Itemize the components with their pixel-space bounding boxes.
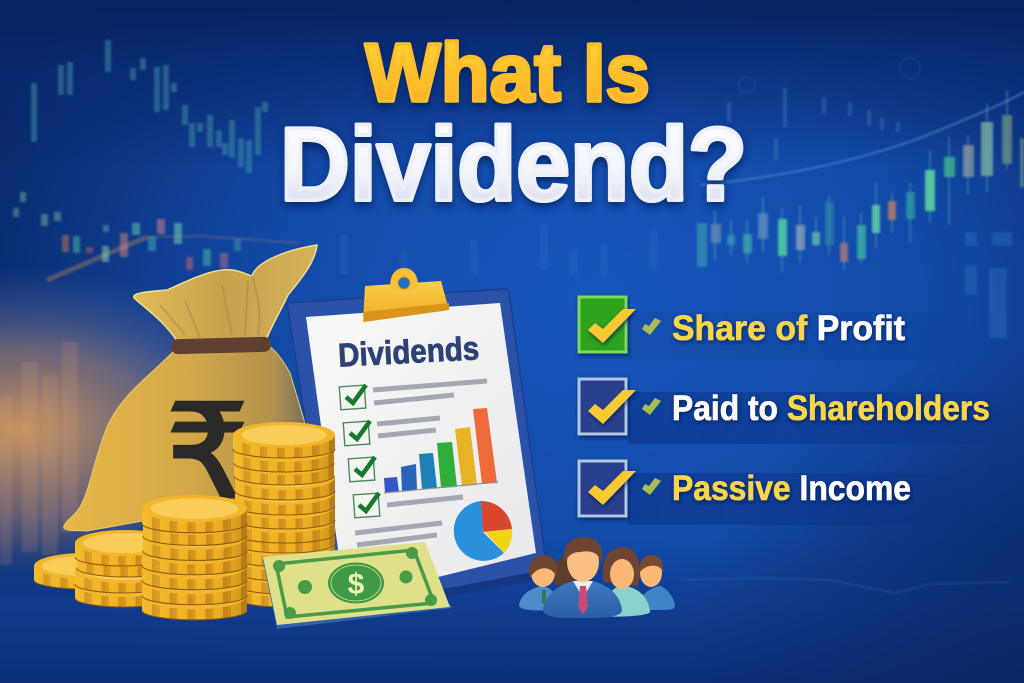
person left bbox=[519, 555, 558, 611]
checkbox bbox=[579, 461, 626, 516]
title: Dividend?: Dividend? bbox=[280, 107, 747, 223]
paper sheet bbox=[306, 303, 536, 600]
hidden person hair bbox=[554, 555, 575, 585]
pie chart bbox=[454, 501, 512, 561]
dollar seal bbox=[328, 562, 384, 604]
clipboard bbox=[287, 268, 548, 618]
background chart: right candlesticks and trend line bbox=[340, 58, 1024, 593]
green checkbox bbox=[579, 297, 626, 352]
large check bbox=[588, 309, 636, 343]
bar chart bbox=[384, 408, 498, 493]
list item: Paid to Shareholders bbox=[579, 379, 990, 434]
loose coin bbox=[34, 553, 134, 589]
label: Passive Income bbox=[672, 469, 911, 508]
label: Paid to Shareholders bbox=[672, 389, 990, 428]
money bag with rupee symbol bbox=[64, 245, 317, 531]
rope tie bbox=[171, 337, 271, 354]
left coin stack bbox=[75, 530, 177, 607]
bill dots bbox=[298, 580, 312, 594]
middle coin stack bbox=[142, 495, 247, 620]
background chart: left candlesticks bbox=[0, 40, 300, 565]
dollar seal: $ bbox=[348, 568, 365, 601]
rupee symbol: ₹ bbox=[166, 379, 249, 525]
right coin stack bbox=[233, 422, 335, 607]
coin stacks bbox=[34, 422, 335, 620]
bill border bbox=[276, 550, 434, 617]
list item: Passive Income bbox=[579, 461, 911, 516]
row background bands bbox=[628, 312, 1008, 525]
main person bbox=[543, 537, 622, 618]
bag top frill bbox=[134, 245, 317, 341]
clipboard heading: Dividends bbox=[337, 329, 480, 374]
dollar bill bbox=[263, 542, 452, 629]
clip bbox=[363, 268, 449, 322]
list item: Share of Profit bbox=[579, 297, 905, 352]
title: What Is: What Is bbox=[365, 26, 650, 119]
checkbox bbox=[579, 379, 626, 434]
bag body bbox=[64, 345, 310, 531]
small check bbox=[642, 398, 661, 415]
label: Share of Profit bbox=[672, 309, 905, 348]
bill corner ornaments bbox=[273, 547, 437, 619]
clipboard board bbox=[287, 289, 547, 610]
shareholders group icon bbox=[519, 537, 675, 618]
small check bbox=[642, 478, 661, 495]
paper text lines bbox=[355, 381, 487, 545]
woman bbox=[600, 547, 650, 617]
checklist bbox=[339, 385, 380, 518]
person far right bbox=[635, 555, 675, 610]
large check bbox=[588, 471, 636, 505]
large check bbox=[588, 390, 636, 424]
small check bbox=[642, 318, 661, 335]
